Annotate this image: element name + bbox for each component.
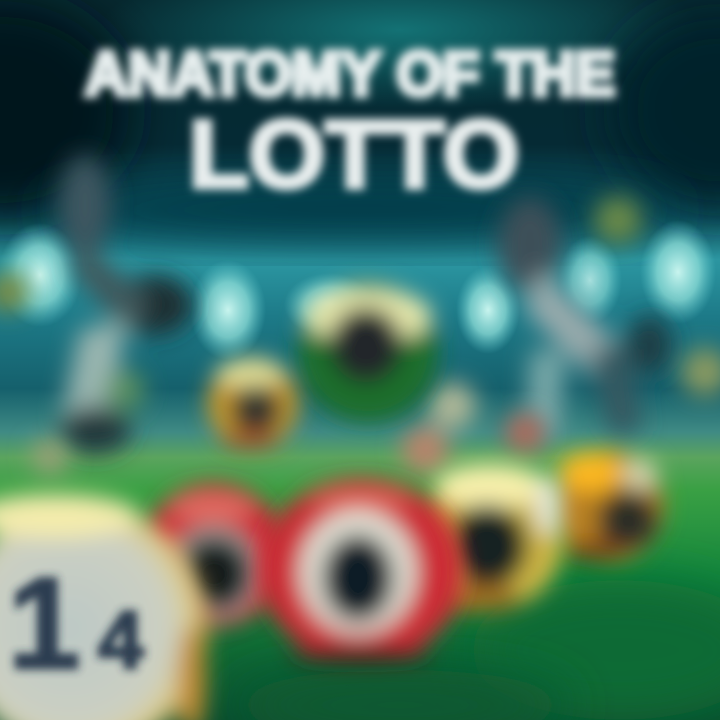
right player silhouette [498, 197, 672, 435]
green lottery ball [298, 282, 438, 422]
red lottery ball, centre [260, 478, 464, 662]
title line 2: LOTTO [189, 101, 519, 208]
orange lottery ball [552, 450, 664, 562]
title line 1: ANATOMY OF THE [85, 40, 615, 109]
cream lottery ball [420, 464, 564, 612]
small distant balls [0, 196, 720, 474]
large number ball, foreground [0, 494, 208, 720]
ball number: 1 [8, 550, 80, 696]
red lottery ball, left [142, 483, 286, 627]
ball number: 4 [98, 595, 144, 686]
left player silhouette [59, 155, 193, 454]
stadium floodlights [0, 220, 716, 360]
yellow lottery ball [207, 357, 299, 449]
